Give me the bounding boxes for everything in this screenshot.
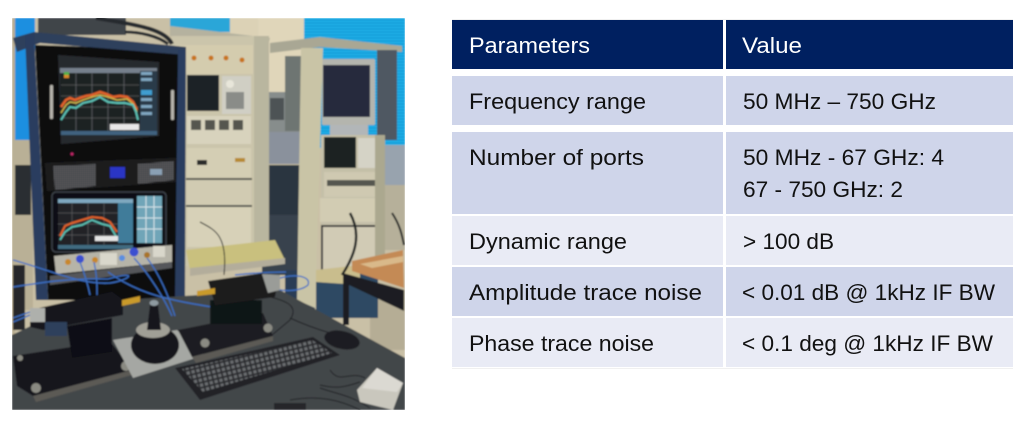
row: number of ports: 67 - 750 GHz: 2 — [743, 177, 903, 202]
table header row: Value — [742, 33, 802, 58]
row: amplitude trace noise: Amplitude trace noise — [469, 280, 702, 305]
blue test cables — [13, 258, 308, 322]
row: number of ports — [452, 132, 1013, 214]
row: dynamic range: > 100 dB — [743, 229, 834, 254]
small adapter on table — [274, 403, 306, 410]
table header row — [452, 20, 1013, 69]
table header row: Parameters — [469, 33, 590, 58]
table surface — [12, 290, 405, 410]
second touchscreen — [52, 192, 166, 252]
middle beige rack — [170, 26, 285, 276]
row: phase trace noise: Phase trace noise — [469, 331, 654, 356]
cable hoses at top — [38, 18, 172, 44]
left edge objects — [13, 140, 33, 330]
rotation stage with mount — [113, 300, 205, 378]
window blinds and walls — [12, 18, 405, 335]
row: dynamic range — [452, 216, 1013, 265]
mouse — [324, 330, 360, 350]
row: frequency range: Frequency range — [469, 89, 646, 114]
row: dynamic range: Dynamic range — [469, 229, 627, 254]
row: frequency range — [452, 76, 1013, 125]
right rack with monitor and instruments — [270, 37, 402, 318]
rack-mounted touchscreen with traces — [50, 55, 174, 156]
orange box on side table — [343, 250, 404, 325]
row: phase trace noise — [452, 318, 1013, 367]
keyboard — [175, 337, 340, 400]
frequency extender module row — [50, 245, 172, 285]
row: frequency range: 50 MHz – 750 GHz — [743, 89, 936, 114]
white junction box — [357, 368, 403, 410]
row: phase trace noise: < 0.1 deg @ 1kHz IF BW — [742, 331, 994, 356]
row: number of ports: Number of ports — [469, 145, 644, 170]
row: amplitude trace noise — [452, 267, 1013, 316]
left extender stage — [13, 292, 140, 402]
dark blue instrument rack — [13, 32, 186, 300]
photo: lab measurement setup with instrument racks — [12, 18, 405, 410]
UPS power unit — [45, 158, 176, 191]
row: number of ports: 50 MHz - 67 GHz: 4 — [743, 145, 944, 170]
table: parameters and values — [452, 19, 1013, 369]
dark cables — [200, 213, 404, 410]
background equipment, between racks — [262, 56, 405, 350]
right extender stage — [178, 273, 280, 363]
row: amplitude trace noise: < 0.01 dB @ 1kHz IF BW — [742, 280, 996, 305]
